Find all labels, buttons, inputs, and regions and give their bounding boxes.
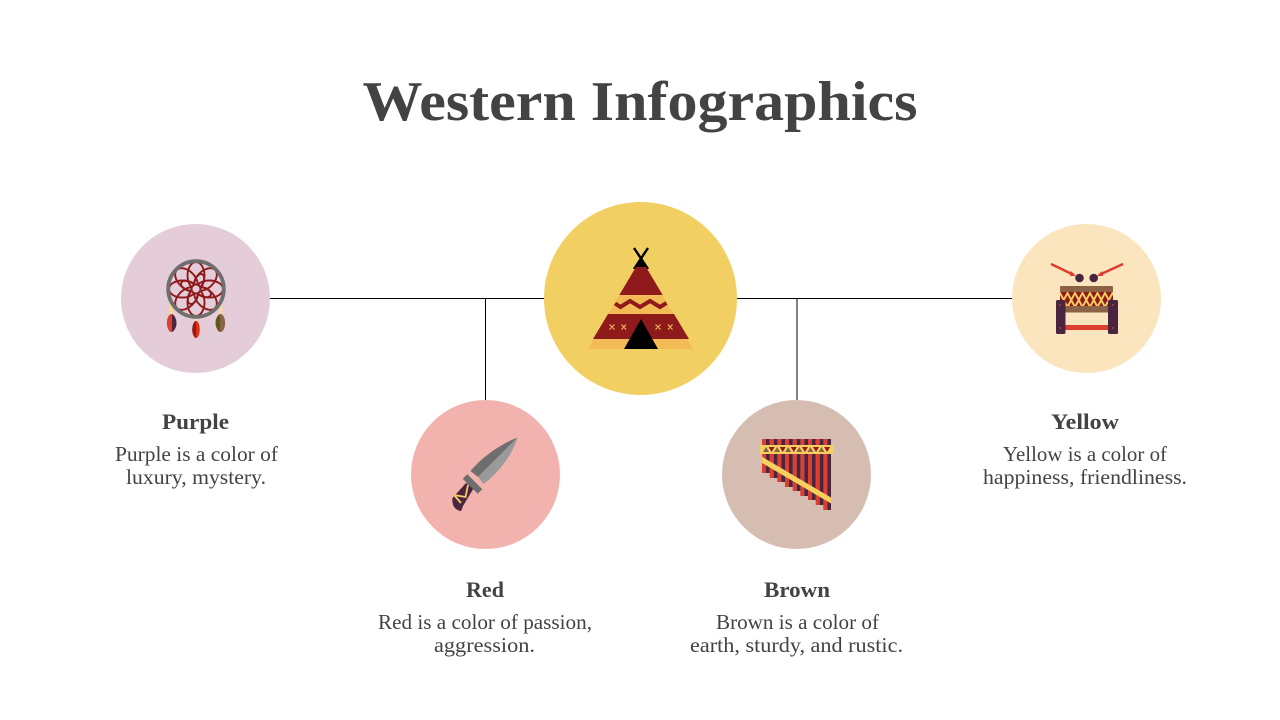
heading: Purple: Purple: [162, 409, 229, 434]
text: red description: aggression.: [434, 633, 535, 657]
center circle: [544, 202, 737, 395]
text: yellow description: happiness, friendliness.: [983, 465, 1187, 489]
red circle: [411, 400, 560, 549]
title: Western Infographics: [362, 71, 918, 133]
panel: brown: [690, 400, 903, 657]
text: yellow description: [983, 442, 1187, 489]
text: brown description: [690, 610, 903, 657]
text: red description: Red is a color of passion,: [378, 610, 592, 634]
panel: center teepee: [544, 202, 737, 395]
heading: Brown: Brown: [764, 577, 830, 602]
text: purple description: luxury, mystery.: [126, 465, 266, 489]
panel: purple: [115, 224, 278, 489]
text: purple description: [115, 442, 278, 489]
panel: yellow: [983, 224, 1187, 489]
icon: drum: [1051, 264, 1123, 334]
icon: dreamcatcher: [167, 261, 225, 338]
heading: Yellow: Yellow: [1051, 409, 1119, 434]
text: red description: [378, 610, 592, 657]
purple circle: [121, 224, 270, 373]
brown circle: [722, 400, 871, 549]
text: brown description: earth, sturdy, and rustic.: [690, 633, 903, 657]
text: brown description: Brown is a color of: [716, 610, 879, 634]
panel: red: [378, 400, 592, 657]
text: yellow description: Yellow is a color of: [1003, 442, 1167, 466]
icon: teepee: [588, 248, 693, 349]
heading: Red: Red: [466, 577, 504, 602]
text: purple description: Purple is a color of: [115, 442, 278, 466]
icon: pan flute: [760, 439, 834, 510]
icon: dagger: [452, 438, 518, 511]
yellow circle: [1012, 224, 1161, 373]
